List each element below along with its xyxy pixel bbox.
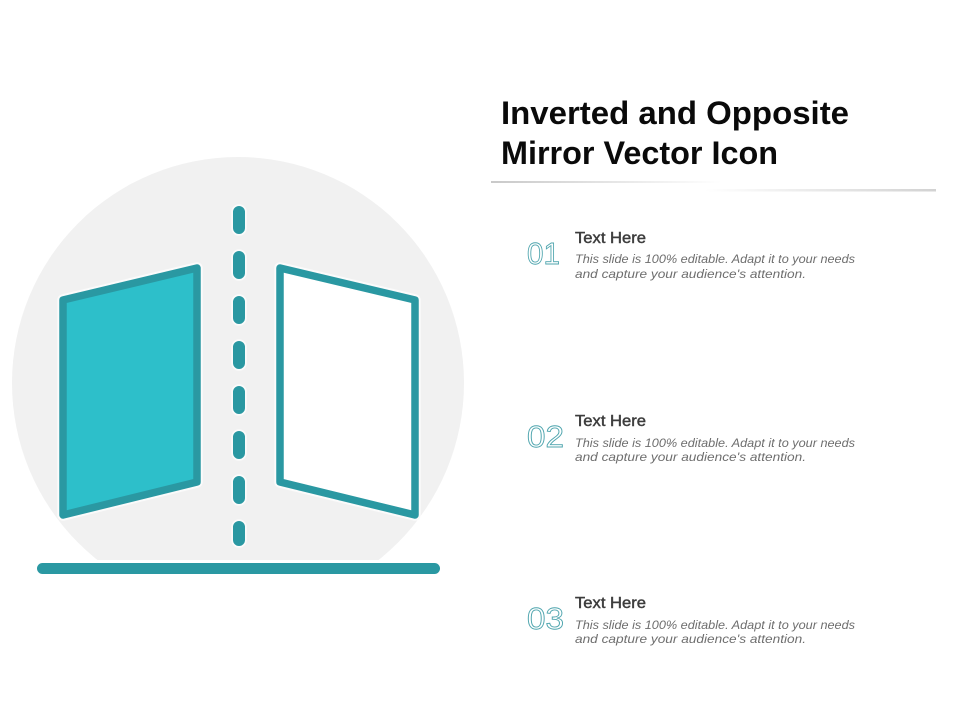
- ground line: [37, 563, 440, 574]
- heading: Text Here: [575, 230, 646, 247]
- title: Inverted and Opposite: [501, 95, 849, 131]
- title: [501, 95, 849, 171]
- description: and capture your audience's attention.: [575, 632, 806, 646]
- item 03: [527, 595, 855, 646]
- heading: Text Here: [575, 595, 646, 612]
- outlined right panel: [280, 268, 415, 515]
- number 01: 01: [527, 236, 560, 271]
- title divider: [491, 181, 936, 192]
- description: and capture your audience's attention.: [575, 450, 806, 464]
- number 02: 02: [527, 419, 564, 454]
- dashed mirror axis: [231, 212, 247, 540]
- item 02: [527, 413, 855, 464]
- icon: mirror illustration: [37, 212, 440, 574]
- description: This slide is 100% editable. Adapt it to your needs: [575, 252, 855, 266]
- background circle: [12, 157, 464, 560]
- heading: Text Here: [575, 413, 646, 430]
- title: Mirror Vector Icon: [501, 135, 778, 171]
- item 01: [527, 230, 855, 281]
- description: [575, 252, 855, 281]
- description: [575, 436, 855, 464]
- number 03: 03: [527, 601, 564, 636]
- filled left panel: [63, 268, 197, 515]
- description: [575, 618, 855, 646]
- description: This slide is 100% editable. Adapt it to your needs: [575, 436, 855, 450]
- description: and capture your audience's attention.: [575, 267, 806, 281]
- description: This slide is 100% editable. Adapt it to your needs: [575, 618, 855, 632]
